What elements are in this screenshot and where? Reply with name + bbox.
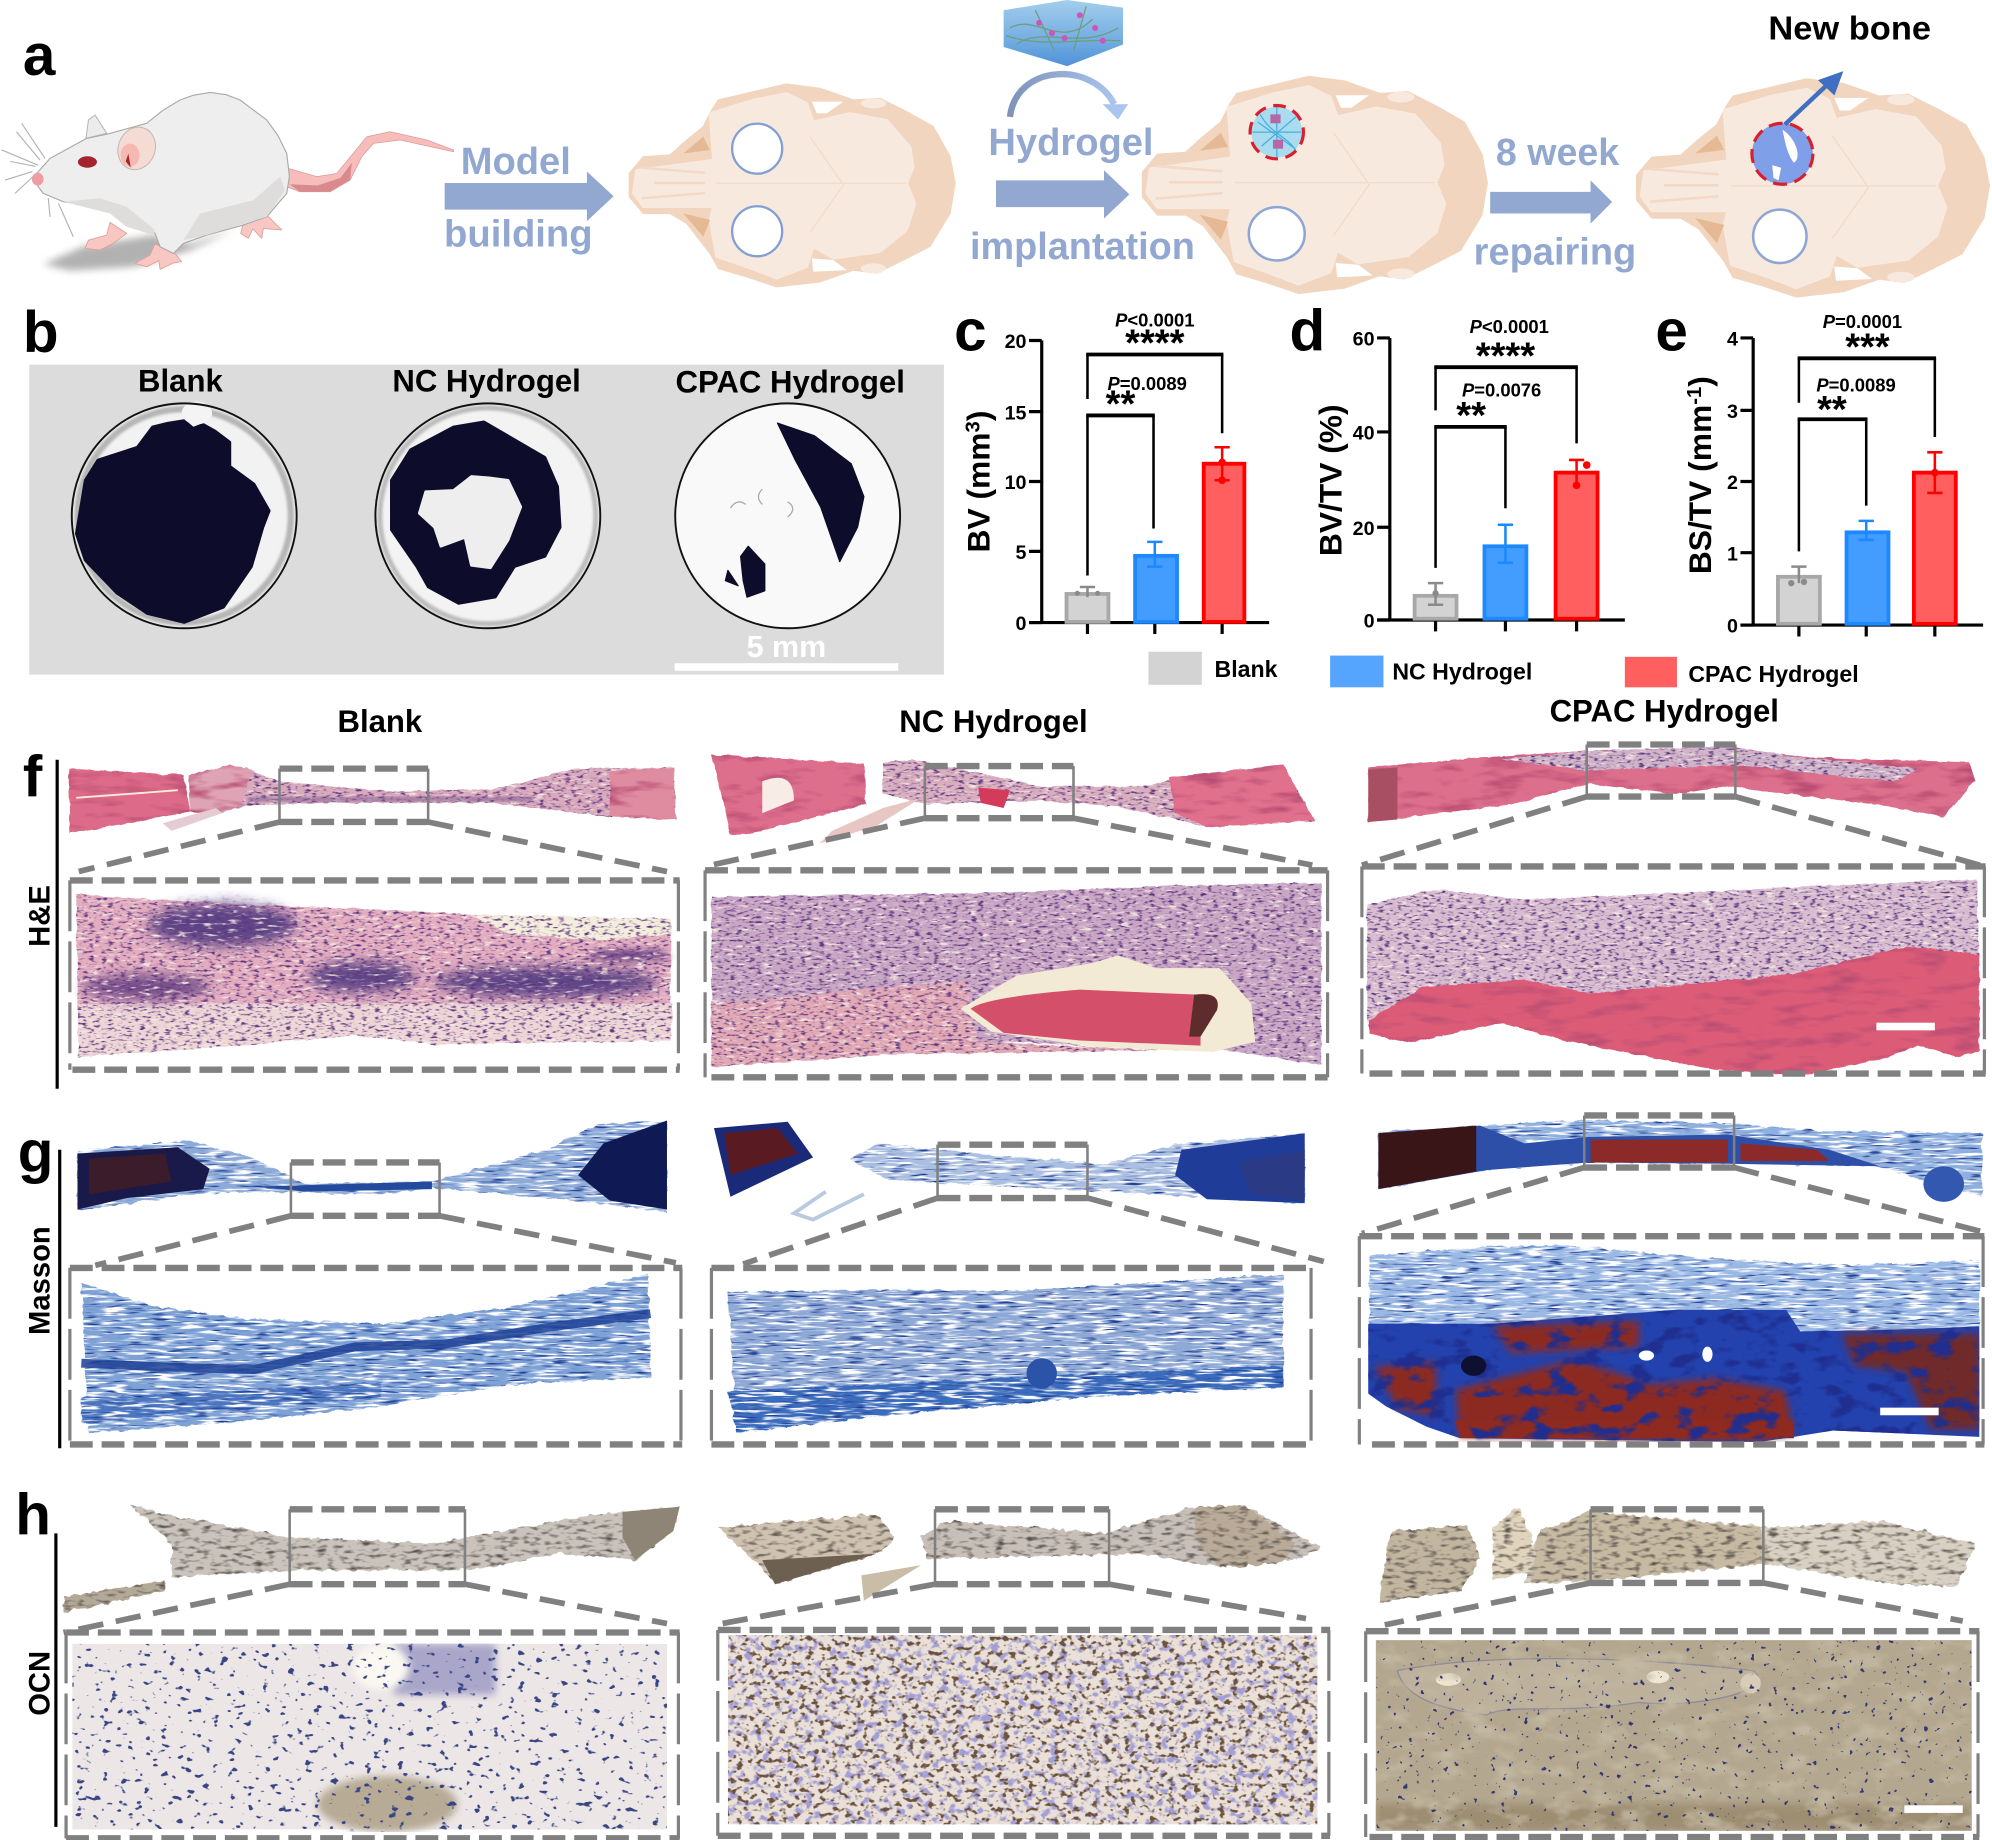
label d: d: [1289, 299, 1325, 364]
micrograph: NC Masson: [728, 1274, 1283, 1433]
p values: ****: [1476, 335, 1535, 377]
thumbnail: CPAC Masson: [1378, 1121, 1982, 1202]
p values: P=0.0001: [1823, 311, 1902, 332]
label a: a: [23, 23, 56, 88]
micro-CT: CPAC Hydrogel: [675, 403, 900, 628]
zoom box: Blank OCN thumbnail: [64, 1509, 667, 1633]
y axis title: BS/TV (mm: [1682, 405, 1718, 574]
zoom frame: Blank Masson: [70, 1268, 682, 1444]
heading: CPAC Hydrogel: CPAC Hydrogel: [676, 365, 905, 400]
gray background: [29, 365, 944, 675]
micro-CT: Blank: [72, 401, 297, 628]
panel a: surgical workflow: [2, 0, 1989, 297]
thumbnail: NC Masson: [714, 1122, 1305, 1220]
p values: [1106, 310, 1194, 426]
y axis title: ): [1682, 376, 1718, 387]
tick labels: 0: [1364, 611, 1375, 633]
axes: [1377, 338, 1390, 620]
column heading: Blank: Blank: [337, 704, 423, 739]
zoom frame: Blank H&E: [70, 880, 680, 1070]
zoom box: CPAC H&E thumbnail: [1362, 744, 1984, 866]
panel b: micro-CT images: [23, 300, 944, 675]
chart d: BV/TV: [1289, 299, 1625, 633]
tick labels: 20: [1005, 331, 1027, 353]
micrograph: CPAC OCN: [1376, 1640, 1972, 1831]
tick labels: 3: [1727, 401, 1738, 423]
zoom box: Blank Masson thumbnail: [95, 1162, 676, 1265]
y axis title: -1: [1684, 387, 1706, 405]
skull 1: [629, 84, 955, 287]
p values: **: [1456, 395, 1486, 437]
significance brackets: [1798, 358, 1936, 551]
micrograph: NC H&E: [711, 883, 1321, 1067]
p values: ****: [1125, 323, 1185, 365]
label g: g: [18, 1119, 53, 1184]
micrograph: CPAC H&E: [1367, 879, 1979, 1075]
zoom frame: NC OCN: [718, 1630, 1330, 1836]
zoom frame: CPAC Masson: [1359, 1236, 1984, 1444]
arrow: pointing to new bone: [1785, 71, 1843, 125]
micrograph: Blank Masson: [81, 1274, 650, 1433]
label e: e: [1655, 299, 1688, 364]
error bars: [1788, 452, 1942, 586]
thumbnail: Blank H&E: [69, 765, 676, 833]
thumbnail: CPAC H&E: [1368, 747, 1975, 822]
bone in NC H&E: [960, 955, 1255, 1052]
significance brackets: [1086, 354, 1223, 576]
chart c: BV: [954, 299, 1269, 635]
tick labels: [1005, 331, 1027, 635]
zoom frame: Blank OCN: [66, 1633, 680, 1838]
zoom box: CPAC Masson thumbnail: [1362, 1115, 1984, 1234]
tick labels: 40: [1353, 423, 1375, 445]
arrow: curved: [1010, 74, 1128, 119]
error bars: [1075, 447, 1230, 597]
scale bar g: [1880, 1408, 1939, 1415]
arrow: model building: [445, 141, 614, 221]
scale bar: [675, 630, 898, 671]
arrow: 8 week repairing: [1490, 180, 1612, 224]
legend: Blank: [1215, 656, 1278, 682]
tick labels: 1: [1727, 543, 1738, 565]
y axis title: 3: [962, 421, 984, 432]
p values: P=0.0076: [1462, 379, 1541, 400]
scale bar h: [1904, 1805, 1963, 1813]
label c: c: [954, 299, 987, 364]
micrograph: NC OCN: [728, 1635, 1317, 1824]
heading: NC Hydrogel: NC Hydrogel: [392, 363, 581, 398]
column heading: CPAC Hydrogel: CPAC Hydrogel: [1550, 694, 1779, 729]
tick labels: 60: [1353, 329, 1375, 351]
heading: Blank: Blank: [138, 363, 223, 398]
bars: [1415, 473, 1598, 619]
p values: [1456, 316, 1549, 437]
text: implantation: implantation: [970, 226, 1195, 268]
zoom frame: NC Masson: [711, 1268, 1312, 1444]
tick labels: 2: [1727, 472, 1738, 494]
axes: [1029, 341, 1042, 623]
p values: [1816, 311, 1902, 431]
micro-CT: NC Hydrogel: [375, 403, 600, 628]
tick labels: 0: [1016, 613, 1027, 635]
p values: ***: [1845, 327, 1890, 369]
micrograph: Blank H&E: [76, 894, 673, 1057]
y axis title: ): [961, 411, 997, 421]
label h: h: [15, 1483, 51, 1548]
tick labels: 4: [1727, 329, 1738, 351]
zoom frame: CPAC OCN: [1366, 1631, 1979, 1837]
zoom box: NC H&E thumbnail: [705, 766, 1312, 866]
zoom box: NC Masson thumbnail: [743, 1145, 1324, 1264]
tick labels: 20: [1353, 518, 1375, 540]
thumbnail: NC H&E: [711, 755, 1315, 844]
p values: P=0.0089: [1816, 374, 1896, 395]
zoom box: NC OCN thumbnail: [722, 1509, 1306, 1624]
skull 2 with hydrogel: [1143, 76, 1487, 293]
label b: b: [23, 300, 59, 365]
legend: CPAC Hydrogel: [1688, 661, 1859, 687]
icon: hydrogel cube: [1004, 0, 1123, 66]
p values: **: [1106, 384, 1135, 426]
p values: P=0.0089: [1108, 373, 1187, 394]
text: repairing: repairing: [1474, 231, 1636, 273]
tick labels: [1353, 329, 1375, 633]
zoom frame: CPAC H&E: [1362, 866, 1986, 1074]
row label H&E: H&E: [25, 885, 57, 947]
skull 3 with new bone: [1637, 79, 1989, 297]
y axis title: BV/TV (%): [1313, 404, 1349, 556]
zoom box: Blank H&E thumbnail: [79, 769, 667, 872]
scale bar f: [1876, 1023, 1935, 1030]
text: Hydrogel: Hydrogel: [988, 122, 1154, 164]
thumbnail: Blank OCN: [64, 1504, 680, 1612]
chart e: BS/TV: [1655, 299, 1983, 638]
tick labels: 5: [1016, 542, 1027, 564]
text: Model: Model: [461, 141, 571, 183]
column heading: NC Hydrogel: NC Hydrogel: [899, 704, 1088, 739]
panel f: H&E staining: [23, 744, 1986, 1089]
scale label: 5 mm: [747, 630, 826, 664]
y axis title: BV (mm: [961, 432, 997, 552]
text: New bone: New bone: [1768, 9, 1931, 46]
error bars: [1428, 460, 1591, 605]
illustration: white rat: [2, 92, 454, 271]
label f: f: [23, 745, 43, 810]
text: building: building: [444, 213, 593, 255]
zoom frame: NC H&E: [705, 870, 1328, 1077]
tick labels: 0: [1727, 616, 1738, 638]
zoom box: CPAC OCN thumbnail: [1385, 1509, 1963, 1625]
p values: P<0.0001: [1115, 310, 1194, 331]
bars: [1778, 473, 1956, 624]
arrow: hydrogel implantation: [996, 170, 1129, 219]
thumbnail: NC OCN: [718, 1505, 1321, 1601]
p values: **: [1817, 389, 1847, 431]
bars: [1067, 464, 1244, 622]
thumbnail: Blank Masson: [77, 1121, 667, 1212]
p values: P<0.0001: [1470, 316, 1549, 337]
text: 8 week: 8 week: [1496, 132, 1620, 174]
panel g: Masson staining: [18, 1115, 1984, 1448]
row label Masson: Masson: [25, 1226, 57, 1335]
panel h: OCN staining: [15, 1483, 1979, 1838]
significance brackets: [1434, 367, 1578, 568]
legend: NC Hydrogel: [1392, 659, 1532, 685]
row label OCN: OCN: [25, 1651, 57, 1716]
legend: [1148, 652, 1859, 687]
tick labels: 15: [1005, 402, 1027, 424]
tick labels: [1727, 329, 1738, 638]
tick labels: 10: [1005, 472, 1027, 494]
micrograph: Blank OCN: [72, 1644, 667, 1832]
thumbnail: CPAC OCN: [1378, 1507, 1975, 1603]
micrograph: CPAC Masson: [1368, 1245, 1979, 1442]
axes: [1740, 338, 1753, 625]
